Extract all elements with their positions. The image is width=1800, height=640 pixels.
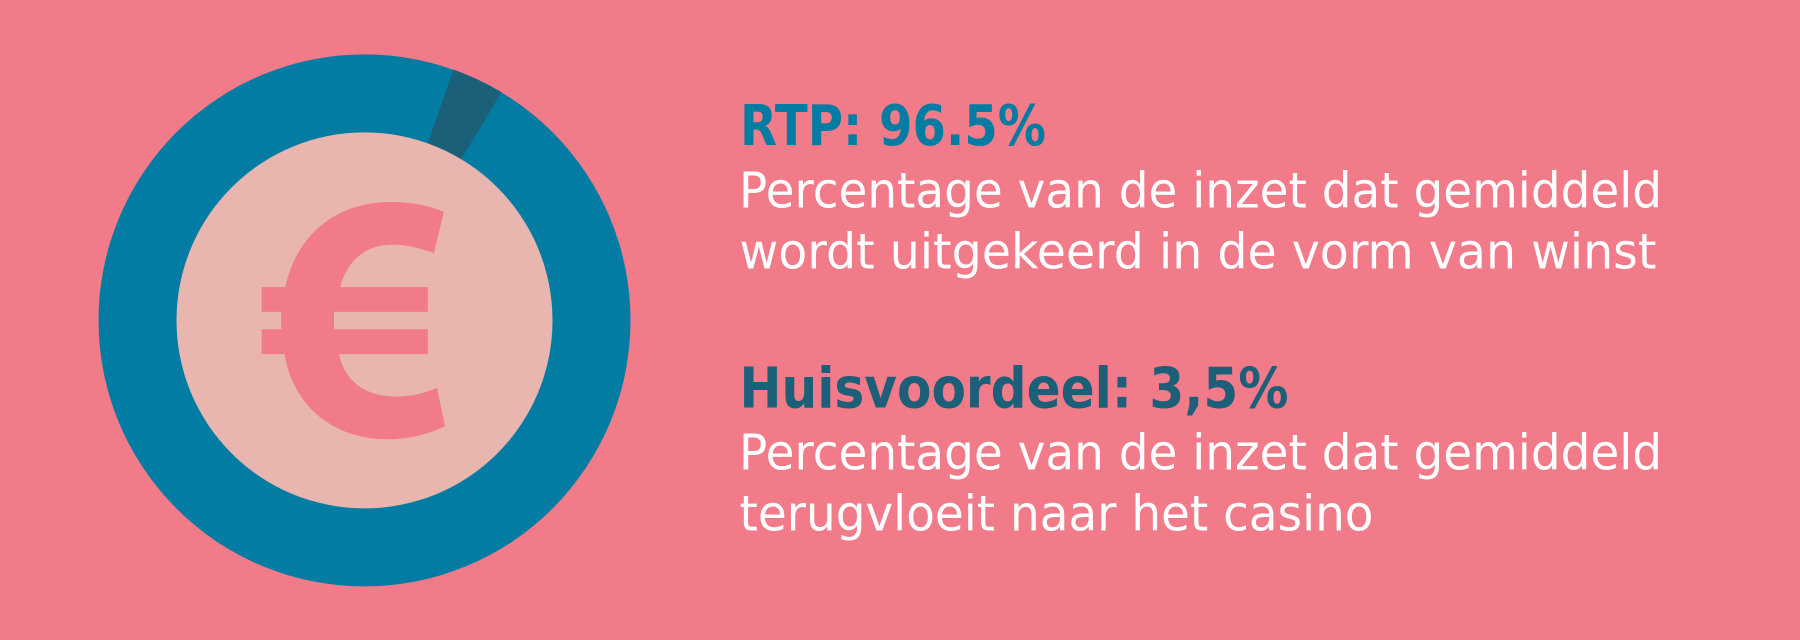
donut ring: RTP 96.5%: [98, 54, 630, 586]
description: RTP: Percentage van de inzet dat gemiddeld: [739, 162, 1662, 219]
description: Huisvoordeel: Percentage van de inzet dat gemiddeld: [739, 424, 1662, 481]
text block: Huisvoordeel: [739, 356, 1662, 542]
description: Huisvoordeel: terugvloeit naar het casino: [740, 485, 1374, 542]
icon: euro sign: [262, 202, 445, 439]
description: RTP: wordt uitgekeerd in de vorm van winst: [740, 224, 1656, 280]
heading: Huisvoordeel: Huisvoordeel: 3,5%: [740, 356, 1288, 421]
donut segment: house edge 3.5%: [428, 70, 502, 160]
description: Huisvoordeel: [739, 424, 1662, 542]
coin: [176, 132, 552, 508]
description: RTP: [739, 162, 1662, 280]
donut chart: RTP vs house edge: [98, 54, 630, 586]
text block: RTP: [739, 94, 1662, 280]
heading: RTP: RTP: 96.5%: [740, 94, 1046, 159]
